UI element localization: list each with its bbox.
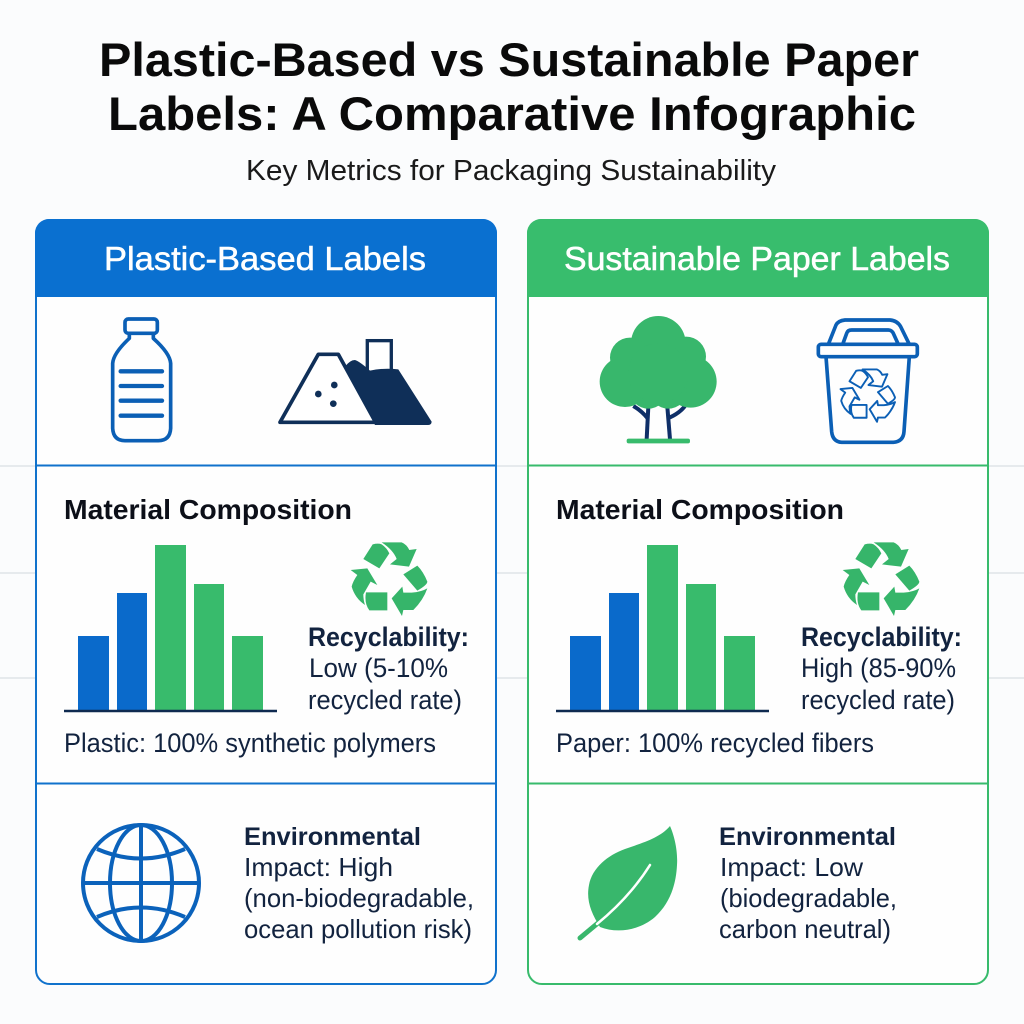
subtitle: Key Metrics for Packaging Sustainability (246, 155, 777, 187)
panel header: plastic: Plastic-Based Labels (104, 240, 426, 277)
title: Plastic-Based vs Sustainable Paper (99, 33, 919, 86)
recyclability text: High (85-90% (801, 653, 956, 683)
icon: recycling symbol (843, 542, 919, 616)
recyclability text: recycled rate) (308, 685, 462, 715)
recyclability text: Low (5-10% (309, 653, 448, 683)
environmental impact text: ocean pollution risk) (244, 914, 472, 944)
icon: plastic bottle (113, 319, 171, 441)
icon: leaf (580, 826, 677, 938)
title: Labels: A Comparative Infographic (108, 87, 916, 140)
environmental impact text: (non-biodegradable, (244, 883, 474, 913)
environmental impact text (244, 823, 474, 944)
icon: recycling symbol (351, 542, 427, 616)
recyclability text: Recyclability: (308, 622, 469, 652)
environmental impact text: Impact: Low (720, 852, 863, 882)
panel header: paper: Sustainable Paper Labels (564, 240, 950, 277)
composition caption: Paper: 100% recycled fibers (556, 728, 874, 758)
composition caption: Plastic: 100% synthetic polymers (64, 728, 436, 758)
panel header: plastic (35, 219, 497, 297)
icon: landfill pile (280, 341, 432, 425)
panel: sustainable paper labels (527, 219, 989, 984)
bar chart (64, 545, 277, 711)
environmental impact text: (biodegradable, (720, 883, 897, 913)
panel: plastic-based labels (35, 219, 497, 984)
title (99, 33, 919, 140)
recyclability text (801, 622, 962, 715)
recyclability text (308, 622, 469, 715)
icon: recycling bin (818, 320, 917, 442)
heading: material composition: Material Composition (556, 494, 844, 525)
environmental impact text: Environmental (719, 823, 896, 851)
bar chart (556, 545, 769, 711)
icon: globe (83, 825, 199, 941)
environmental impact text: carbon neutral) (719, 914, 891, 944)
panel header: paper (527, 219, 989, 297)
environmental impact text (719, 823, 897, 944)
environmental impact text: Environmental (244, 823, 421, 851)
heading: material composition: Material Composition (64, 494, 352, 525)
recyclability text: recycled rate) (801, 685, 955, 715)
recyclability text: Recyclability: (801, 622, 962, 652)
icon: tree (600, 316, 717, 443)
environmental impact text: Impact: High (244, 852, 393, 882)
